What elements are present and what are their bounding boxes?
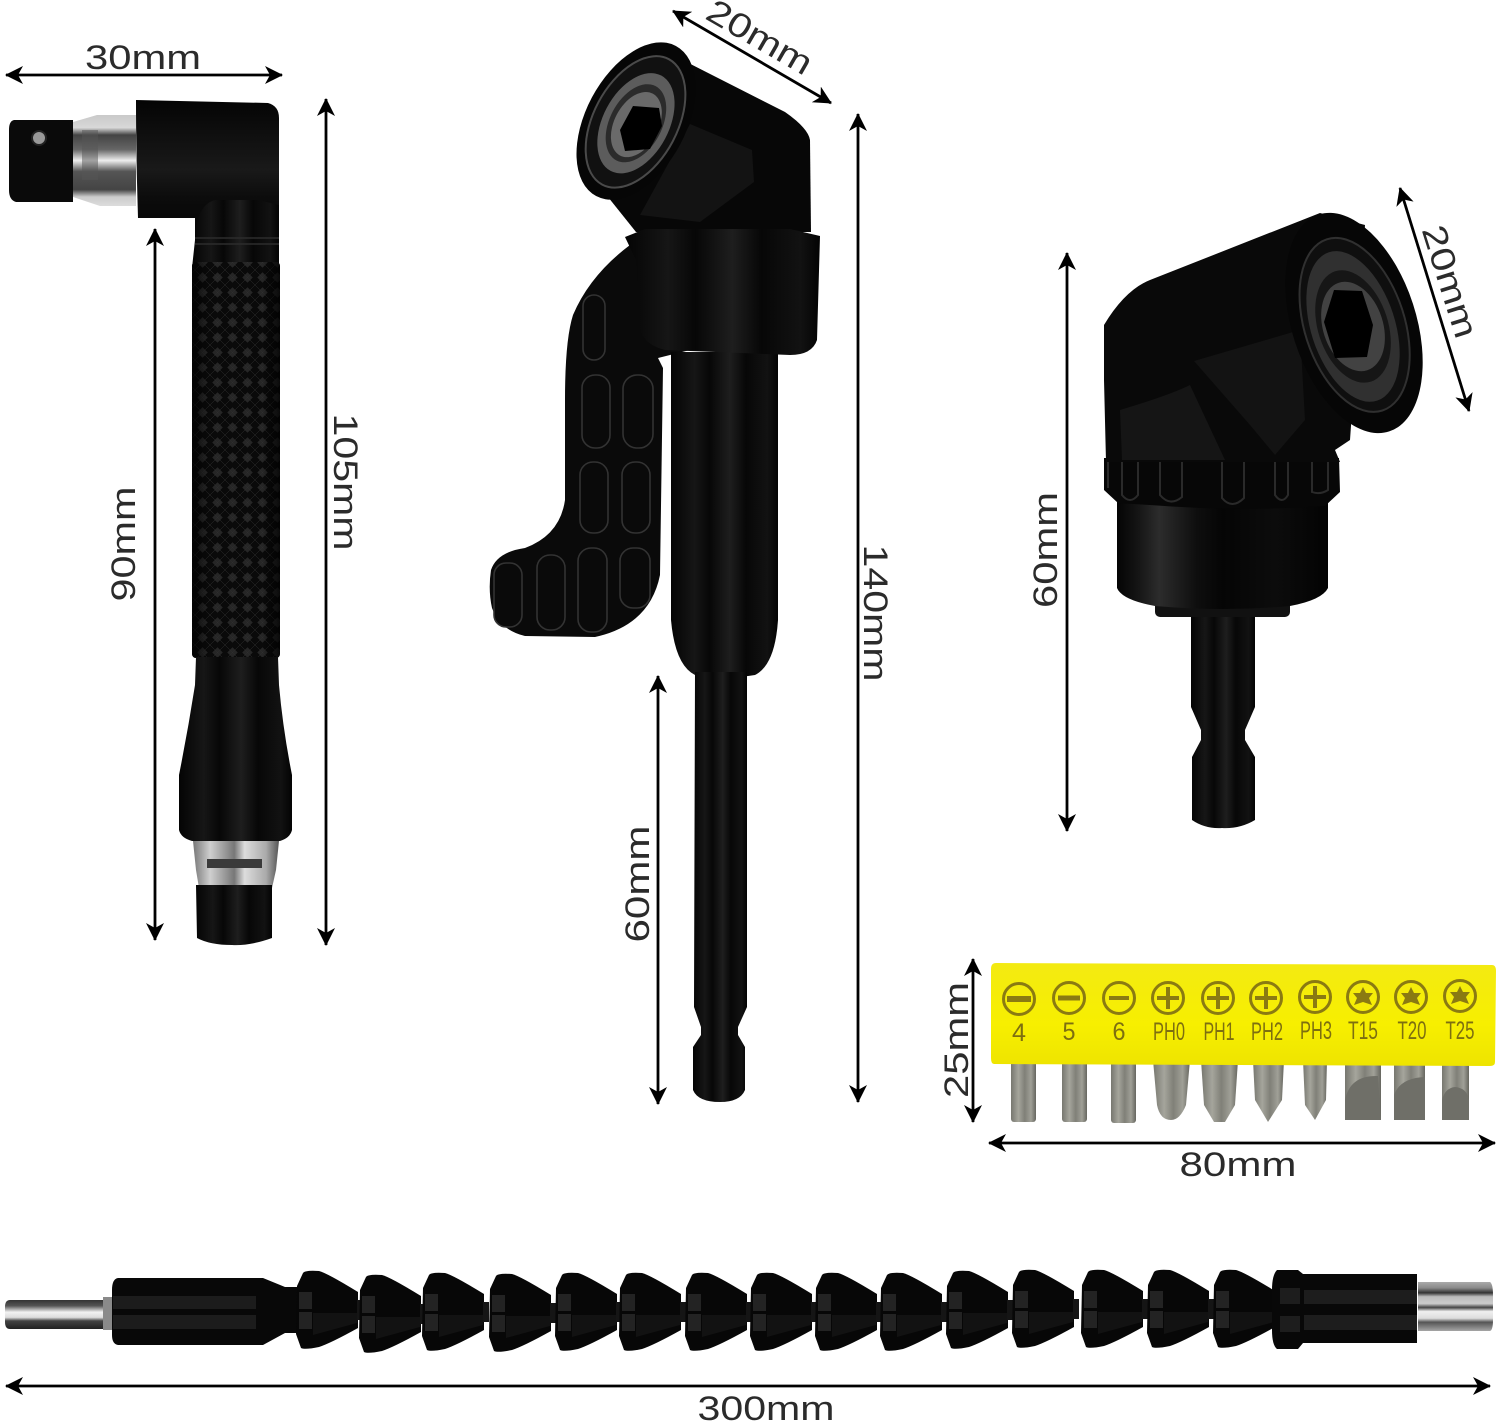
dimension: 105mm: 105mm [326,414,364,550]
tool: flexible shaft extension [5,1270,1493,1353]
phillips icons [1152,982,1330,1014]
bit size labels: T20 [1398,1017,1426,1045]
knurled grip [192,262,280,658]
head face [1260,195,1448,451]
lower barrel [1117,500,1328,609]
yellow holder [991,963,1496,1066]
end metal holder [1418,1282,1493,1331]
lower collar [179,657,292,841]
bit size labels: 4 [1012,1019,1026,1047]
bottom socket [196,885,272,945]
head body [1104,213,1365,462]
dimension: 60mm shank: 60mm [619,826,657,942]
hex socket [1324,290,1373,358]
hex shank [1191,612,1255,828]
socket pin [32,131,46,145]
chrome neck [193,841,279,888]
tool: angle head adapter [1104,195,1448,828]
lever grip slots [494,295,653,632]
bit size labels [1012,1017,1474,1047]
bit size labels: 6 [1112,1018,1126,1046]
socket tip [9,120,73,202]
shaft [671,352,778,678]
flex links [296,1270,1280,1353]
clamp collar [625,229,820,355]
hex shank [693,672,747,1102]
bit size labels: 5 [1062,1018,1076,1046]
panel: yellow bit holder set [991,963,1496,1123]
bit size labels: T25 [1446,1017,1474,1045]
dimension: 80mm: 80mm [1180,1146,1296,1184]
tool: right-angle socket wrench [9,100,292,945]
dimension: 60mm adapter: 60mm [1027,492,1065,608]
head face [552,22,720,220]
dimension: 20mm adapter: 20mm [1414,221,1485,343]
neck [192,200,279,268]
dimension: 90mm: 90mm [105,486,143,602]
slot icons [1004,982,1134,1014]
end sleeve [1272,1270,1417,1349]
bit size labels: PH2 [1251,1018,1283,1046]
bit size labels: PH3 [1300,1017,1332,1045]
torx icons [1348,980,1476,1012]
chrome collar [73,115,136,206]
bit size labels: PH1 [1204,1018,1234,1046]
hex socket [620,106,662,151]
dimension: 20mm diagonal [673,0,831,103]
handle [112,1278,298,1345]
dimension: 25mm: 25mm [938,982,976,1098]
head body [588,46,811,232]
driver bits [1011,1060,1469,1123]
hex tip [5,1300,104,1329]
dimension: 30mm: 30mm [85,39,201,77]
flange [1155,600,1290,617]
lever arm [490,240,690,637]
tool: angle adapter with lever [490,22,820,1102]
dimension: 20mm adapter [1400,188,1485,411]
bit size labels: PH0 [1153,1018,1185,1046]
ribbed ring [1104,458,1340,509]
elbow [136,100,279,240]
bit size labels: T15 [1348,1017,1378,1045]
dimension: 140mm: 140mm [856,544,894,682]
